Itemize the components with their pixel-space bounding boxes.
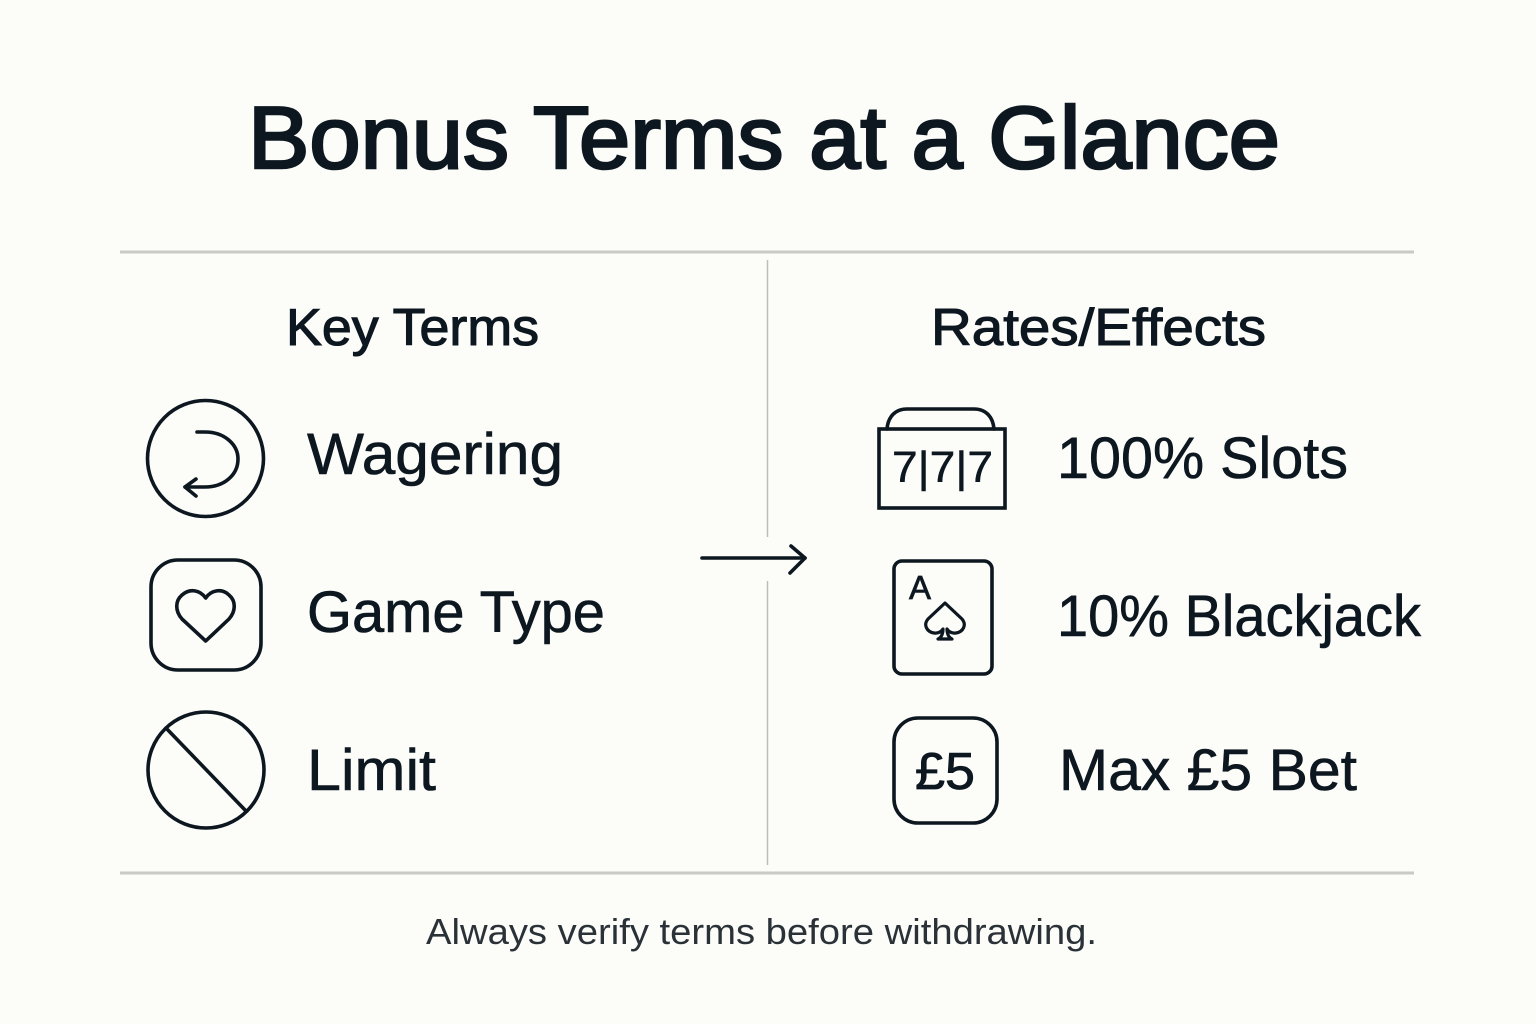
heading: key terms: Key Terms xyxy=(286,299,539,357)
arrow xyxy=(702,546,805,573)
icon: ace of spades card xyxy=(894,561,992,674)
label: 100% slots: 100% Slots xyxy=(1057,426,1348,491)
panel: key terms xyxy=(148,299,605,828)
panel: rates and effects xyxy=(879,299,1422,823)
icon: slot machine xyxy=(879,409,1005,508)
heading: rates and effects: Rates/Effects xyxy=(931,299,1266,357)
label: game type: Game Type xyxy=(307,580,605,645)
icon: slot machine: 7|7|7 xyxy=(892,443,993,492)
icon: wagering loop arrow xyxy=(148,400,264,516)
icon: ace of spades card: A xyxy=(909,569,931,606)
icon: game type heart xyxy=(151,560,261,670)
label: 10% blackjack: 10% Blackjack xyxy=(1057,584,1422,649)
icon: five pound max bet: £5 xyxy=(915,743,975,801)
label: wagering: Wagering xyxy=(307,422,563,487)
footer note: Always verify terms before withdrawing. xyxy=(426,911,1097,952)
icon: five pound max bet xyxy=(894,718,997,823)
label: limit: Limit xyxy=(307,738,436,803)
title: Bonus Terms at a Glance xyxy=(248,88,1280,187)
icon: limit prohibition sign xyxy=(148,712,264,828)
label: max bet: Max £5 Bet xyxy=(1059,738,1357,803)
